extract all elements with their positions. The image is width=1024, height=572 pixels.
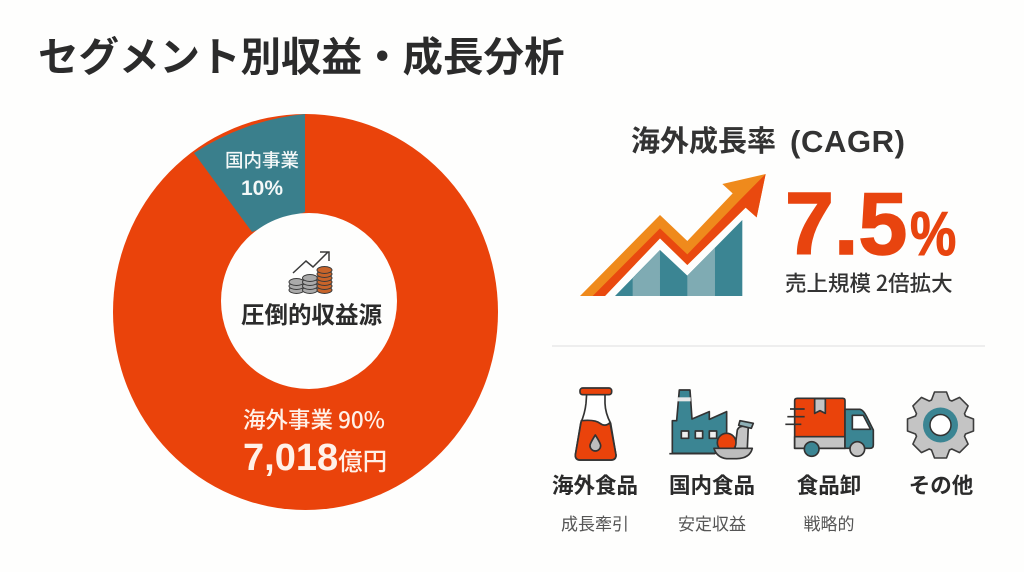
sublabel: 成長牽引 bbox=[561, 510, 629, 535]
label: 海外食品 bbox=[552, 469, 638, 500]
segment: other bbox=[908, 392, 974, 500]
icon: soy sauce bottle bbox=[575, 388, 616, 460]
segment: overseas food bbox=[552, 388, 638, 535]
label: 国内食品 bbox=[669, 469, 755, 500]
value: 7.5%: % bbox=[910, 200, 956, 269]
segment: domestic 10% bbox=[194, 114, 305, 232]
heading: CAGR: (CAGR) bbox=[790, 124, 905, 159]
center label: 圧倒的収益源 bbox=[241, 296, 382, 330]
heading: CAGR bbox=[631, 118, 905, 160]
segment: food wholesale bbox=[785, 398, 873, 535]
segment: domestic food bbox=[669, 390, 755, 535]
icon: growth arrow chart bbox=[580, 174, 766, 296]
label: domestic: 10% bbox=[241, 177, 283, 200]
label: domestic: 国内事業 bbox=[225, 147, 299, 173]
label: その他 bbox=[909, 469, 973, 500]
icon: coins and trend bbox=[289, 252, 332, 294]
title: セグメント別収益・成長分析 bbox=[38, 24, 564, 83]
segment: overseas 90% bbox=[113, 114, 498, 510]
value: 7.5%: 7.5 bbox=[785, 174, 907, 273]
heading: CAGR: 海外成長率 bbox=[631, 118, 776, 160]
sublabel: 安定収益 bbox=[678, 510, 746, 535]
label: overseas: 海外事業 90% bbox=[243, 403, 385, 435]
label: 食品卸 bbox=[797, 469, 861, 500]
label: domestic bbox=[225, 147, 299, 200]
label: overseas: 7,018億円 bbox=[243, 437, 387, 479]
icon: delivery truck bbox=[785, 398, 873, 456]
center hole bbox=[221, 213, 397, 389]
sublabel: 戦略的 bbox=[804, 510, 854, 535]
icon: gear bbox=[908, 392, 974, 458]
caption: 売上規模 2倍拡大 bbox=[785, 267, 953, 298]
donut chart bbox=[113, 114, 498, 510]
icon: factory with food bbox=[669, 390, 753, 459]
label: overseas bbox=[243, 403, 387, 479]
